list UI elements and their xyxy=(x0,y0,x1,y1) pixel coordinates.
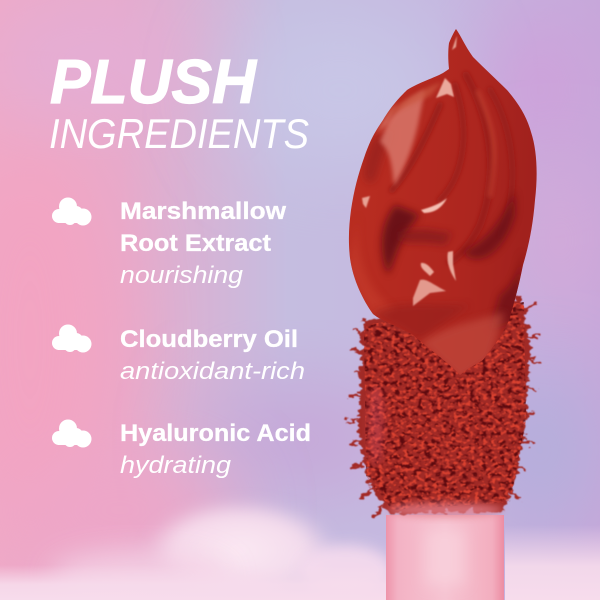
ingredient: Cloudberry Oil xyxy=(52,324,305,385)
heading: PLUSH: PLUSH xyxy=(50,48,257,117)
icon: cloud xyxy=(52,324,92,352)
icon: cloud xyxy=(52,198,92,226)
product: lip applicator xyxy=(348,29,538,600)
ingredient name: Root Extract xyxy=(120,230,271,257)
ingredient benefit: antioxidant-rich xyxy=(120,358,305,385)
ingredient benefit: nourishing xyxy=(120,262,244,289)
fold shading xyxy=(392,75,512,262)
title xyxy=(49,48,309,157)
ingredient: Marshmallow Root Extract xyxy=(52,198,286,289)
ingredient name: Marshmallow xyxy=(120,198,286,225)
ingredient name: Hyaluronic Acid xyxy=(120,420,311,447)
clear tube xyxy=(386,515,504,600)
heading: INGREDIENTS: INGREDIENTS xyxy=(49,110,309,157)
red gloss swirl xyxy=(348,29,537,380)
ingredient: Hyaluronic Acid xyxy=(52,420,311,479)
gloss highlights xyxy=(362,36,457,306)
background: clouds at the bottom xyxy=(0,500,600,600)
icon: cloud xyxy=(52,420,92,448)
ingredient benefit: hydrating xyxy=(120,452,232,479)
fuzzy flocked tip xyxy=(348,298,538,517)
ingredient name: Cloudberry Oil xyxy=(120,326,298,353)
